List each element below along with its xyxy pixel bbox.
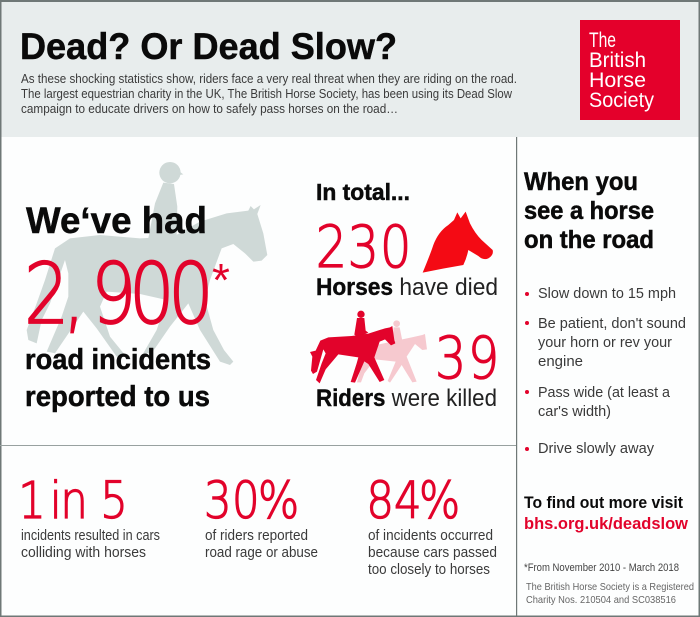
stat: 30% bbox=[204, 472, 318, 561]
stat: 1 in 5 bbox=[18, 472, 160, 561]
title: Dead? Or Dead Slow? bbox=[20, 26, 397, 67]
charity registration bbox=[526, 581, 694, 606]
logo: The British Horse Society: The bbox=[589, 29, 616, 52]
list: advice: Drive slowly away bbox=[538, 440, 654, 457]
list: advice: car's width) bbox=[538, 403, 611, 420]
logo: The British Horse Society bbox=[580, 20, 680, 120]
intro text bbox=[21, 71, 517, 116]
stat: 1 in 5: 1in5 bbox=[18, 472, 128, 531]
logo: The British Horse Society: British bbox=[589, 49, 646, 72]
asterisk: * bbox=[212, 254, 230, 306]
stat: 84%: because cars passed bbox=[368, 544, 497, 561]
stat: 30%: of riders reported bbox=[205, 527, 308, 544]
label: Horses have died: Horses have died bbox=[316, 274, 498, 301]
icon: red horse head bbox=[423, 212, 493, 273]
stat: 1 in 5: incidents resulted in cars bbox=[21, 527, 160, 544]
panel: header bbox=[1, 1, 699, 137]
list: advice: your horn or rev your bbox=[538, 334, 672, 351]
stat: 230: 230 bbox=[316, 213, 411, 281]
stat: 84%: 84% bbox=[366, 472, 460, 531]
stat: 2,900: 2,900 bbox=[24, 246, 214, 343]
heading: We've had: We‘ve had bbox=[26, 200, 207, 241]
stat: 39: 39 bbox=[435, 324, 499, 392]
stat: 84% bbox=[366, 472, 497, 578]
label: road incidents: reported to us bbox=[25, 381, 210, 413]
heading: When you see a horse on the road: When you bbox=[524, 168, 638, 196]
icon: horses and riders silhouette bbox=[310, 311, 427, 383]
panel: bottom statistics bbox=[18, 472, 497, 578]
heading: When you see a horse on the road: on the road bbox=[524, 226, 654, 254]
stat: 30%: road rage or abuse bbox=[205, 544, 318, 561]
list: advice bbox=[525, 285, 686, 457]
panel: in total bbox=[310, 179, 499, 412]
intro text: The largest equestrian charity in the UK, The British Horse Society, has been using its Dead Slow bbox=[21, 86, 513, 101]
stat: 1 in 5: colliding with horses bbox=[21, 544, 146, 561]
footnote: *From November 2010 - March 2018 bbox=[524, 562, 679, 574]
intro text: As these shocking statistics show, riders face a very real threat when they are riding on the road. bbox=[21, 71, 517, 86]
heading: When you see a horse on the road: see a horse bbox=[524, 197, 654, 225]
intro text: campaign to educate drivers on how to safely pass horses on the road… bbox=[21, 101, 398, 116]
logo: The British Horse Society: Society bbox=[589, 89, 654, 112]
icon: grey horse and rider silhouette bbox=[27, 162, 267, 365]
label: Riders were killed: Riders were killed bbox=[316, 385, 497, 412]
charity registration: Charity Nos. 210504 and SC038516 bbox=[526, 594, 676, 606]
logo: The British Horse Society: Horse bbox=[589, 69, 646, 92]
stat: 84%: of incidents occurred bbox=[368, 527, 493, 544]
list: advice: engine bbox=[538, 353, 583, 370]
list: advice: Be patient, don't sound bbox=[538, 315, 686, 332]
list: advice: Pass wide (at least a bbox=[538, 384, 671, 401]
stat: 30%: 30% bbox=[204, 472, 299, 531]
heading: In total: In total... bbox=[316, 179, 410, 205]
call to action: To find out more visit bbox=[524, 493, 683, 512]
call to action: bhs.org.uk/deadslow bbox=[524, 514, 689, 533]
list: advice: Slow down to 15 mph bbox=[538, 285, 676, 302]
heading: When you see a horse on the road bbox=[524, 168, 654, 254]
panel: 2,900 incidents bbox=[24, 162, 267, 413]
stat: 84%: too closely to horses bbox=[368, 561, 490, 578]
call to action bbox=[524, 493, 689, 533]
panel: when you see a horse bbox=[524, 168, 694, 606]
label: road incidents bbox=[25, 344, 211, 413]
label: road incidents: road incidents bbox=[25, 344, 211, 376]
